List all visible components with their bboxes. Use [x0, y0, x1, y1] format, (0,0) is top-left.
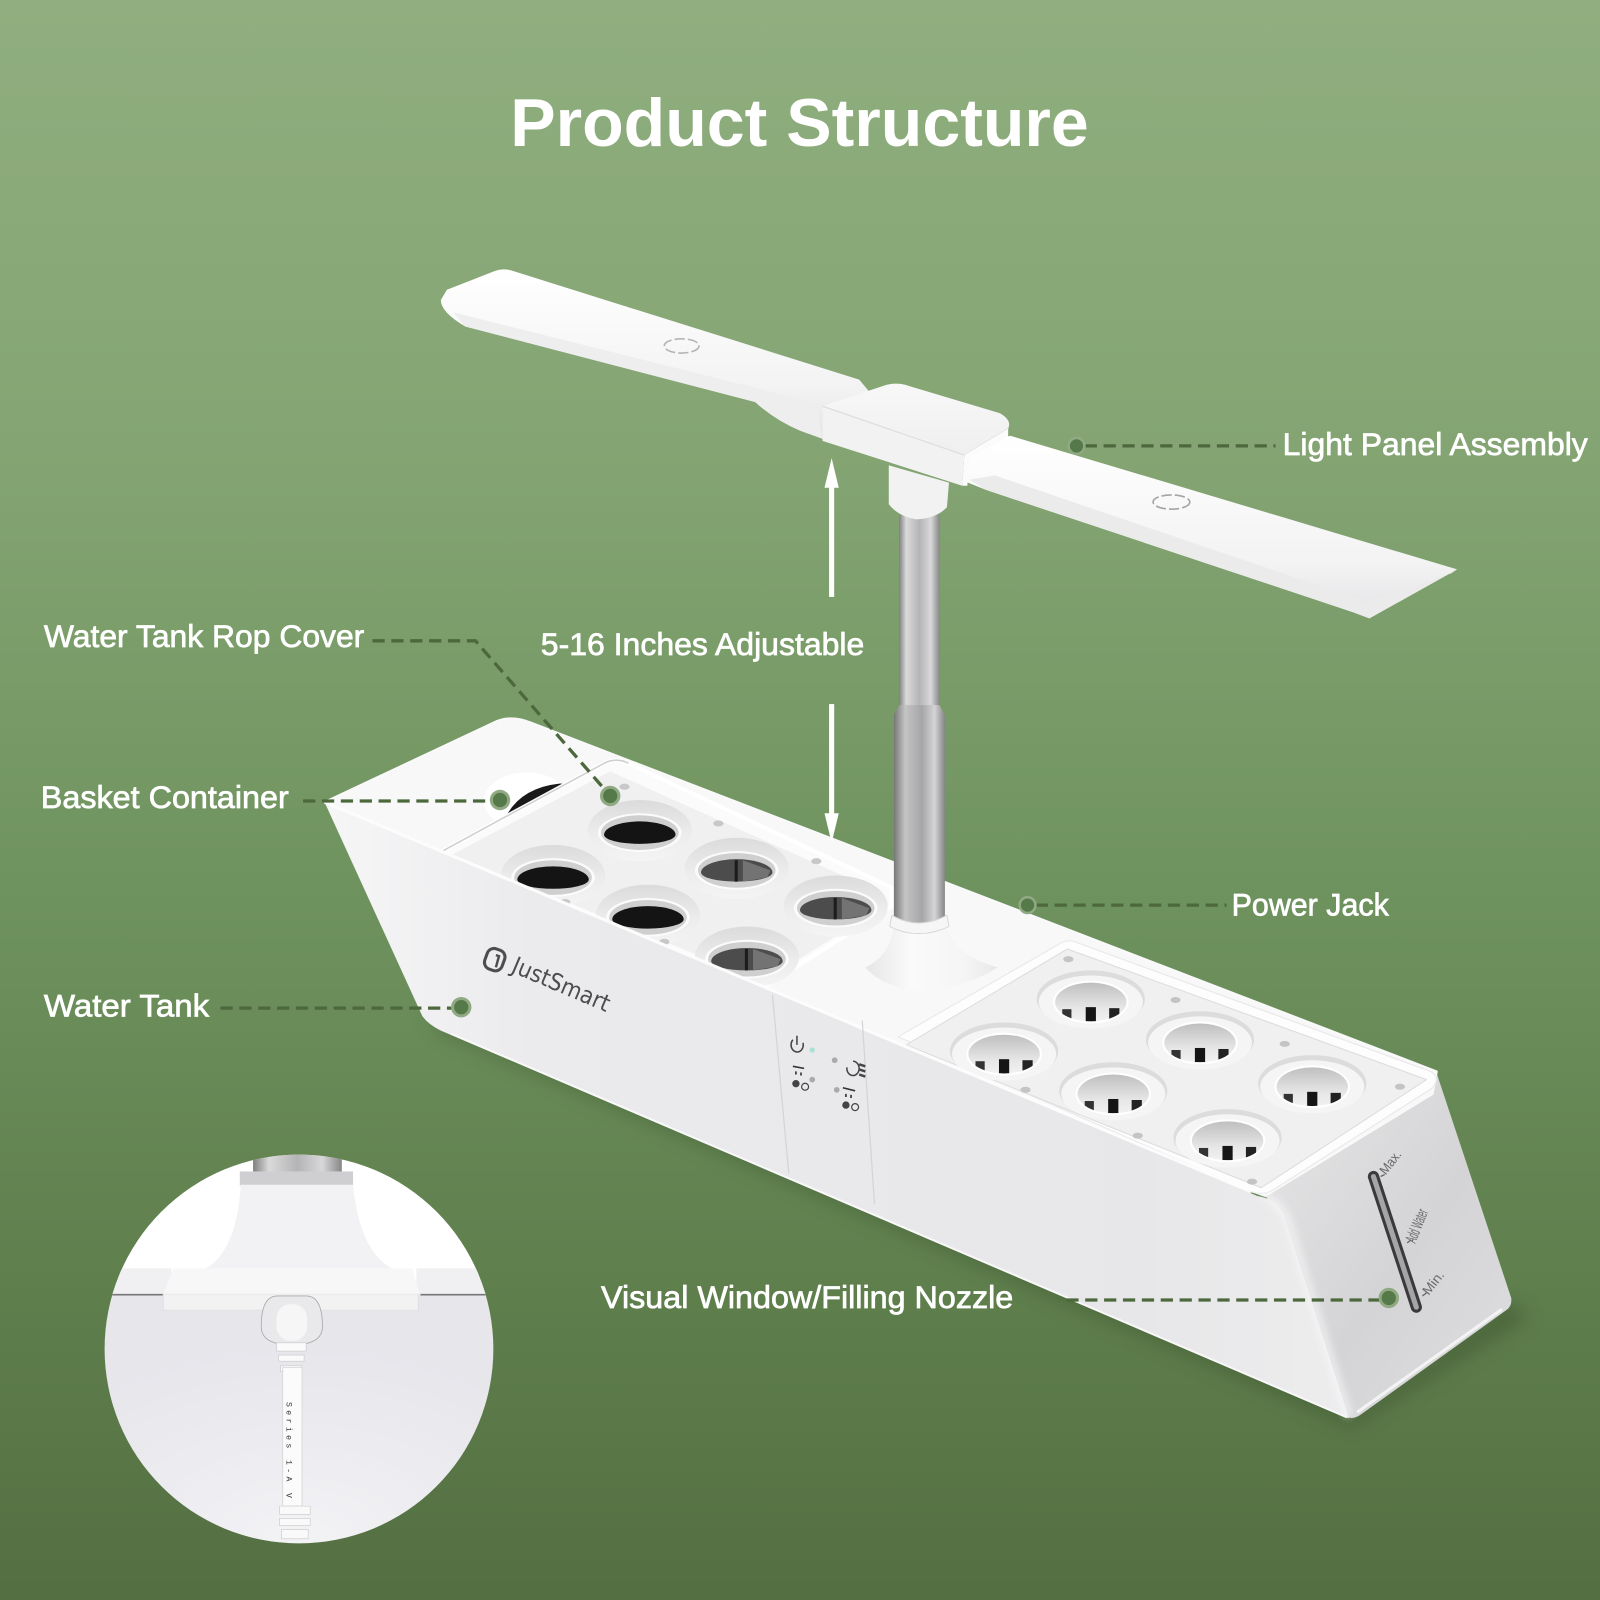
front edge highlight	[324, 802, 1251, 1192]
inset flare	[206, 1184, 392, 1268]
pole mount flare	[865, 918, 998, 992]
water level window: Max.	[1376, 1147, 1404, 1177]
light panel right arm	[965, 436, 1457, 618]
callout: light panel assembly: Light Panel Assembly	[1283, 426, 1588, 462]
pole collar	[890, 915, 949, 934]
callout: visual window / filling nozzle: Visual Window/Filling Nozzle	[601, 1279, 1013, 1315]
brand logo: JustSmart	[506, 950, 615, 1018]
callout: water tank rop cover	[44, 618, 620, 806]
inset cable print: Series 1-A V	[284, 1402, 294, 1498]
water level window: Add Water	[1402, 1206, 1432, 1245]
left basket holes	[501, 800, 888, 988]
control panel	[772, 995, 874, 1204]
lower pole	[894, 704, 945, 922]
title: Product Structure	[510, 86, 1089, 161]
inset: power jack detail	[102, 1153, 502, 1545]
height arrow: down	[824, 704, 839, 843]
inset lower relief	[280, 1506, 310, 1539]
inset background	[102, 1153, 500, 1296]
callout: power jack	[1018, 886, 1389, 922]
light panel center cap	[822, 384, 1009, 486]
right tray pins	[1020, 956, 1405, 1185]
right basket holes	[950, 970, 1366, 1167]
base front face	[324, 802, 1349, 1418]
right basket tray	[898, 941, 1436, 1193]
callout: visual window / filling nozzle	[601, 1279, 1399, 1315]
callout: water tank	[44, 987, 471, 1023]
inset cable	[283, 1367, 302, 1506]
base shadow	[429, 1015, 1529, 1427]
base end face foot	[1357, 1309, 1502, 1412]
product: grow light unit	[324, 269, 1529, 1427]
end face highlight	[1265, 1196, 1349, 1416]
upper pole	[899, 515, 940, 705]
inset pole	[253, 1154, 342, 1172]
water level window	[1373, 1147, 1447, 1307]
height arrow: up	[824, 458, 839, 597]
callout: water tank rop cover: Water Tank Rop Cover	[44, 618, 364, 654]
front bottom rim	[451, 1034, 1347, 1417]
brand logo	[482, 946, 615, 1018]
callout: water tank: Water Tank	[44, 987, 209, 1023]
callout: basket container: Basket Container	[41, 779, 289, 815]
inset plug	[261, 1296, 322, 1345]
callout: light panel assembly	[1067, 426, 1588, 462]
callout: basket container	[41, 779, 510, 815]
base end face	[1265, 1073, 1511, 1418]
height label: 5-16 Inches Adjustable	[541, 626, 864, 662]
inset cable strain relief	[277, 1343, 306, 1371]
base top face	[324, 718, 1437, 1196]
stem neck	[889, 465, 949, 519]
tank rop cover opening	[484, 772, 569, 830]
water level window: Min.	[1419, 1268, 1447, 1298]
left tray pins	[560, 784, 821, 945]
light panel left arm	[441, 269, 869, 439]
callout: power jack: Power Jack	[1232, 886, 1389, 922]
inset plate	[163, 1294, 418, 1310]
left basket tray	[439, 760, 892, 988]
